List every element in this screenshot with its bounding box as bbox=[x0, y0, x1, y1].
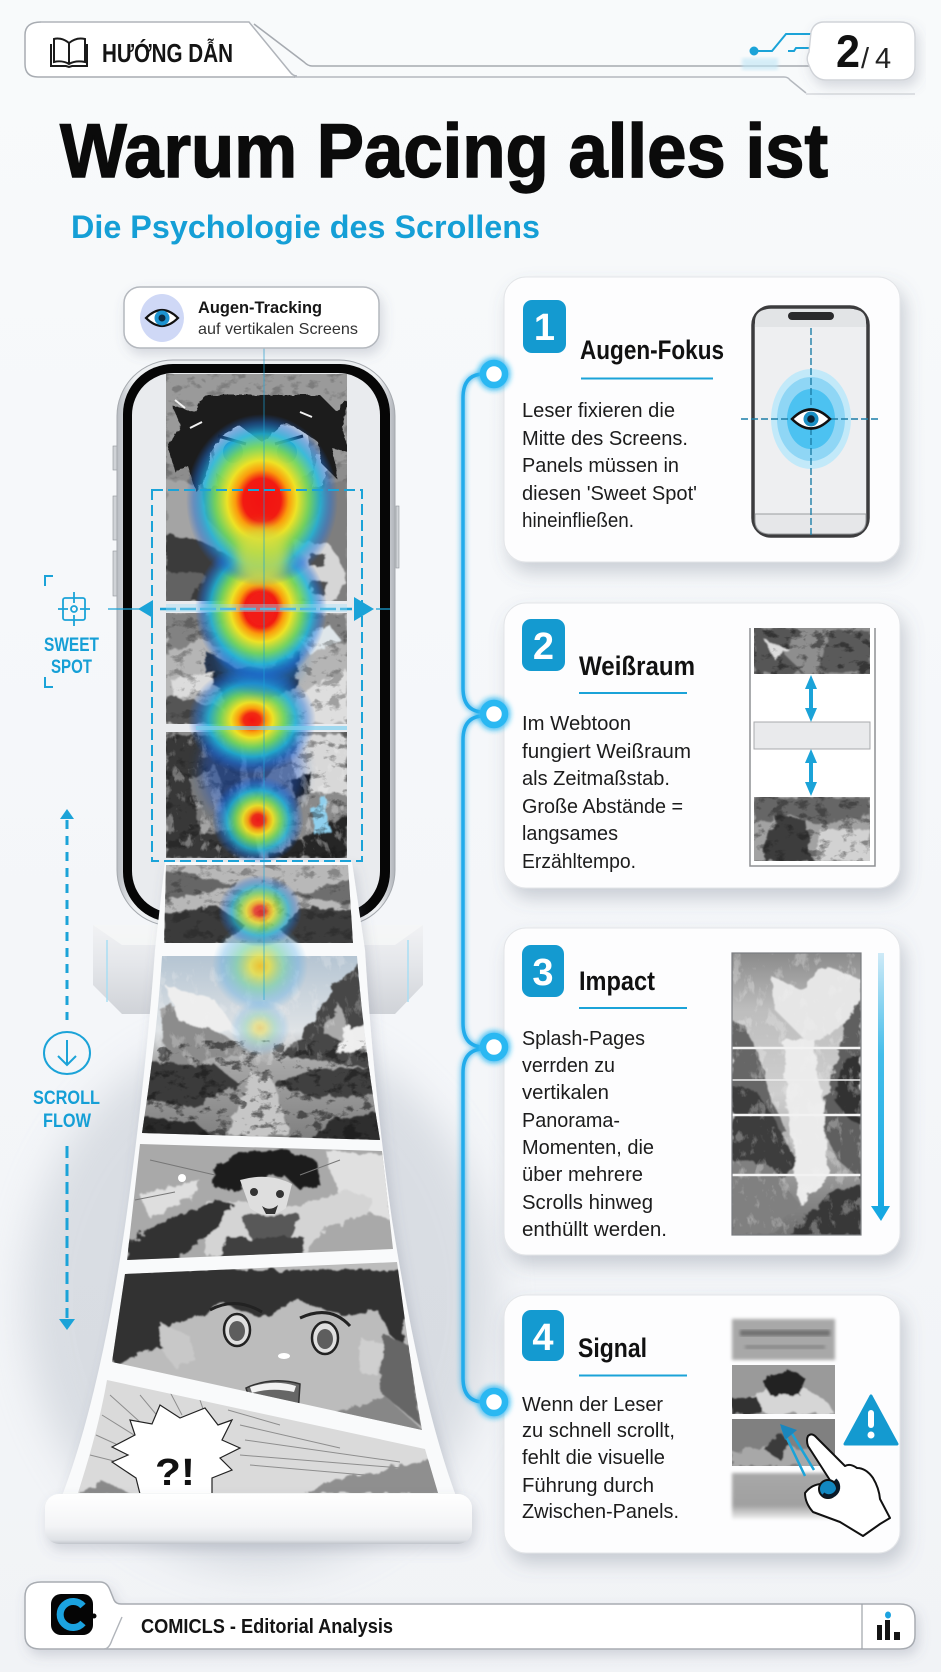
card 1: Augen-Fokus: Augen-Fokus bbox=[580, 335, 724, 365]
card 3: Impact: Impact bbox=[579, 966, 655, 996]
icon: warning bbox=[845, 1396, 897, 1444]
badge 4 bbox=[522, 1310, 564, 1361]
body text: als Zeitmaßstab. bbox=[522, 767, 670, 790]
title: Warum Pacing alles ist bbox=[60, 109, 828, 194]
scroll flow indicator: FLOW bbox=[43, 1110, 91, 1132]
eye tracking callout: auf vertikalen Screens bbox=[198, 321, 358, 338]
header label: HƯỚNG DẪN bbox=[102, 38, 233, 68]
badge 2: 2 bbox=[533, 626, 554, 668]
panel: running hero bbox=[125, 1142, 395, 1262]
card 4: Signal: Signal bbox=[578, 1333, 647, 1363]
body text: Mitte des Screens. bbox=[522, 427, 688, 450]
subtitle: Die Psychologie des Scrollens bbox=[71, 209, 540, 245]
footer text: COMICLS - Editorial Analysis bbox=[141, 1616, 393, 1638]
panel: valley landscape bbox=[140, 955, 385, 1145]
card 4: Signal bbox=[504, 1295, 900, 1553]
card 1: Augen-Fokus bbox=[504, 277, 900, 562]
body text: über mehrere bbox=[522, 1163, 643, 1186]
body text: enthüllt werden. bbox=[522, 1218, 667, 1241]
panel: action silhouette bbox=[166, 613, 347, 724]
badge 2 bbox=[522, 619, 565, 671]
eye tracking callout bbox=[124, 287, 379, 348]
arrow: scroll bbox=[871, 953, 890, 1221]
spacing arrows bbox=[805, 675, 817, 796]
logo bbox=[51, 1594, 96, 1635]
body text: fehlt die visuelle bbox=[522, 1446, 665, 1469]
icon: book bbox=[51, 38, 87, 67]
burst text: ?! bbox=[155, 1452, 195, 1494]
sweet spot label: SWEET bbox=[44, 634, 99, 656]
badge 4: 4 bbox=[532, 1317, 554, 1359]
body text: Zwischen-Panels. bbox=[522, 1500, 679, 1523]
footer bar bbox=[25, 1582, 915, 1649]
body text: Im Webtoon bbox=[522, 712, 631, 735]
body text: Große Abstände = bbox=[522, 795, 683, 818]
timeline nodes bbox=[483, 363, 505, 1413]
phone bbox=[113, 360, 399, 926]
eye tracking callout: Augen-Tracking bbox=[198, 298, 322, 317]
card 2: Weißraum: Weißraum bbox=[579, 651, 695, 681]
sweet spot overlay bbox=[108, 348, 390, 1000]
page counter bbox=[807, 22, 915, 80]
body text: Momenten, die bbox=[522, 1136, 654, 1159]
panel: dark vortex bbox=[166, 732, 347, 858]
badge 3: 3 bbox=[532, 952, 554, 994]
stand bbox=[93, 925, 423, 1014]
scroll flow indicator bbox=[33, 809, 100, 1330]
body text: Splash-Pages bbox=[522, 1027, 645, 1050]
sweet spot label: SPOT bbox=[51, 656, 92, 678]
timeline connector bbox=[463, 374, 484, 1402]
body text: langsames bbox=[522, 822, 618, 845]
heatmap bbox=[186, 414, 338, 1056]
body text bbox=[522, 399, 697, 532]
body text: Wenn der Leser bbox=[522, 1393, 663, 1416]
whitespace diagram bbox=[750, 628, 875, 866]
card 2: Weißraum bbox=[504, 603, 900, 888]
body text: Leser fixieren die bbox=[522, 399, 675, 422]
body text bbox=[522, 712, 691, 873]
comic strip paper bbox=[62, 862, 456, 1496]
page counter: 2 bbox=[836, 26, 860, 77]
body text: Panels müssen in bbox=[522, 454, 679, 477]
icon: scroll down bbox=[44, 1032, 90, 1074]
scroll flow indicator: SCROLL bbox=[33, 1087, 100, 1109]
icon: hand bbox=[805, 1434, 890, 1536]
icon: target bbox=[58, 592, 90, 626]
body text bbox=[522, 1393, 679, 1523]
icon: eye bbox=[792, 410, 830, 428]
panel: burst with ?! bbox=[75, 1378, 442, 1495]
body text: vertikalen bbox=[522, 1081, 609, 1104]
sweet spot label bbox=[44, 576, 99, 687]
icon: eye bbox=[140, 294, 184, 342]
badge 3 bbox=[522, 945, 564, 997]
panel: surprised face bbox=[100, 1260, 430, 1435]
body text bbox=[522, 1027, 667, 1241]
arrows: swipe bbox=[782, 1428, 814, 1476]
header bar bbox=[25, 22, 915, 94]
panorama panels bbox=[732, 953, 861, 1235]
card 3: Impact bbox=[504, 928, 900, 1255]
body text: verrden zu bbox=[522, 1054, 615, 1077]
body text: fungiert Weißraum bbox=[522, 740, 691, 763]
body text: hineinfließen. bbox=[522, 509, 634, 532]
body text: Führung durch bbox=[522, 1474, 654, 1497]
mini phone with eye bbox=[741, 307, 881, 537]
fast scroll panels bbox=[732, 1319, 897, 1536]
panel: hero close-up bbox=[166, 374, 350, 605]
page counter: /4 bbox=[861, 43, 897, 75]
icon: bars bbox=[877, 1612, 900, 1640]
badge 1 bbox=[523, 300, 566, 353]
body text: diesen 'Sweet Spot' bbox=[522, 482, 697, 505]
body text: Panorama- bbox=[522, 1109, 620, 1132]
phone buttons bbox=[113, 446, 399, 596]
body text: Scrolls hinweg bbox=[522, 1191, 653, 1214]
badge 1: 1 bbox=[534, 307, 555, 349]
paper roll bbox=[45, 1494, 472, 1544]
panel: shore in phone bbox=[160, 865, 360, 945]
icon: circuit bbox=[742, 34, 812, 70]
body text: Erzähltempo. bbox=[522, 850, 636, 873]
body text: zu schnell scrollt, bbox=[522, 1419, 675, 1442]
